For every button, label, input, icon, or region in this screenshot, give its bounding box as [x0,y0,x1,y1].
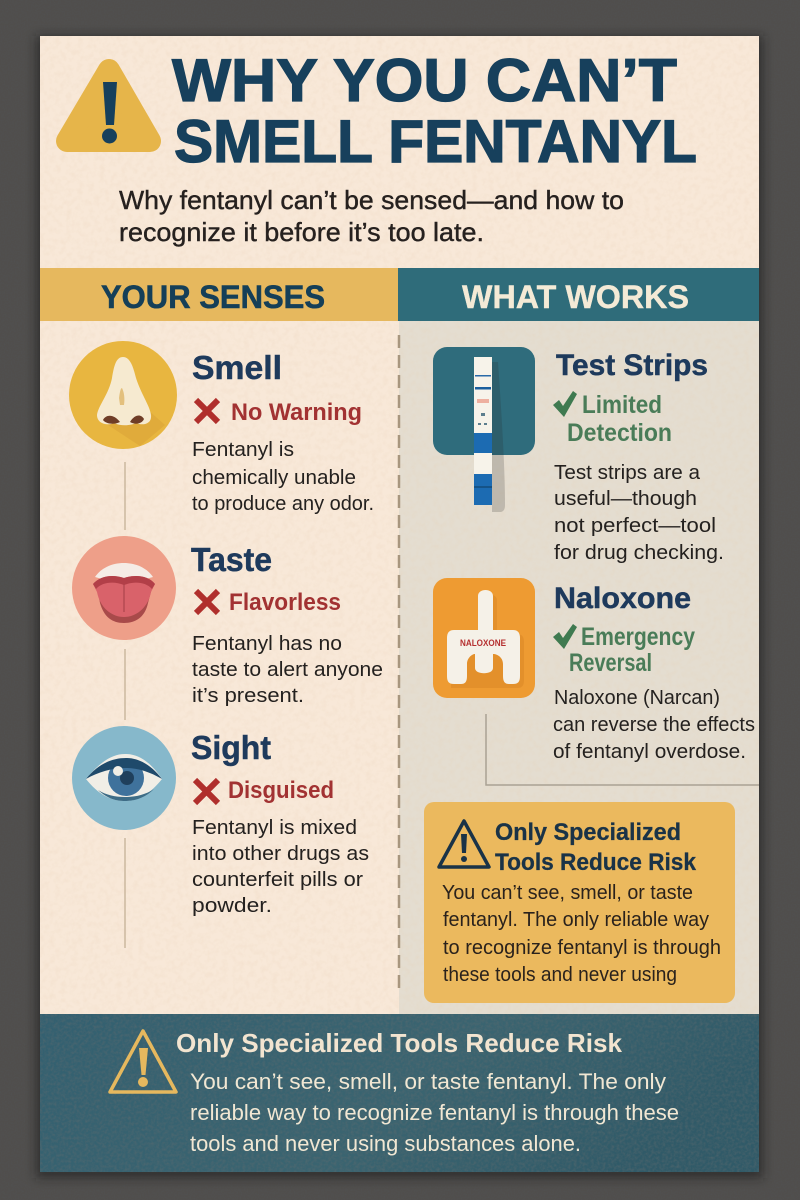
icon: red x [196,591,218,613]
body text: into other drugs as [192,843,369,865]
body text: Fentanyl has no [192,633,342,655]
banner body: tools and never using substances alone. [190,1131,581,1156]
icon: warning outline [439,821,489,867]
panel: test strips: Test Strips [556,349,708,382]
icon: red x [195,780,218,803]
body text: powder. [192,895,272,917]
panel: bottom banner [40,1014,759,1172]
body text: can reverse the effects [553,714,755,736]
panel header: your senses [40,268,398,321]
panel: naloxone: Emergency [581,623,695,651]
panel: taste: Taste [191,541,272,578]
panel: test strips: Detection [567,419,672,447]
callout body: You can’t see, smell, or taste [442,882,693,904]
body text: it’s present. [192,685,304,707]
body text [192,817,369,917]
body text: Test strips are a [554,462,701,484]
callout heading: Only Specialized [495,819,681,846]
body text [554,462,724,564]
panel: test strips: Limited [582,391,662,419]
panel: naloxone [433,578,755,763]
column divider [398,335,400,992]
panel: taste [72,536,383,707]
body text: not perfect—tool [554,515,716,537]
icon: warning outline [110,1031,176,1092]
subtitle [119,185,624,247]
body text [192,633,383,707]
panel: test strips [433,347,724,564]
icon: green check [553,391,577,417]
panel: sight: Sight [191,729,271,766]
icon: red x [196,400,218,422]
banner heading: Only Specialized Tools Reduce Risk [176,1028,623,1058]
body text: of fentanyl overdose. [553,741,746,763]
body text: taste to alert anyone [192,659,383,681]
callout body: these tools and never using [443,964,677,986]
callout: only specialized tools [424,802,735,1003]
subtitle: Why fentanyl can’t be sensed—and how to [119,185,624,215]
callout body [442,882,721,986]
body text: useful—though [554,488,697,510]
body text: Naloxone (Narcan) [554,687,720,709]
connector line [486,714,759,785]
body text [553,687,755,763]
icon: naloxone device [433,578,535,698]
panel: taste: Flavorless [229,589,341,616]
callout heading: Tools Reduce Risk [495,849,697,876]
body text [192,439,374,515]
callout body: to recognize fentanyl is through [443,937,721,959]
callout heading [495,819,697,876]
icon: test strip [433,347,535,512]
icon: green check [553,624,577,649]
title [172,47,697,175]
body text: for drug checking. [554,542,724,564]
panel: sight: Disguised [228,777,334,804]
panel header: your senses: YOUR SENSES [101,279,325,315]
title: WHY YOU CAN’T [172,47,677,114]
body text: Fentanyl is [192,439,294,461]
body text: Fentanyl is mixed [192,817,357,839]
panel header: what works: WHAT WORKS [462,279,689,315]
callout body: fentanyl. The only reliable way [443,909,709,931]
panel: naloxone: Naloxone [554,582,691,615]
icon: tongue [72,536,176,640]
body text: counterfeit pills or [192,869,363,891]
banner body: reliable way to recognize fentanyl is through these [190,1100,679,1125]
icon: nose [69,341,177,449]
icon: warning triangle [67,70,150,144]
title: SMELL FENTANYL [174,108,697,175]
banner body: You can’t see, smell, or taste fentanyl. The only [190,1069,666,1094]
banner body [190,1069,679,1156]
body text: chemically unable [192,467,356,489]
subtitle: recognize it before it’s too late. [119,217,484,247]
connectors between senses [124,462,126,948]
panel: naloxone: Reversal [569,649,652,677]
body text: to produce any odor. [192,493,374,515]
icon: eye [72,726,176,830]
panel: smell: Smell [192,349,282,386]
icon: naloxone device: NALOXONE [460,638,506,649]
panel: sight [72,726,369,917]
panel header: what works [398,268,759,321]
panel: smell: No Warning [231,399,362,426]
panel: smell [69,341,374,515]
